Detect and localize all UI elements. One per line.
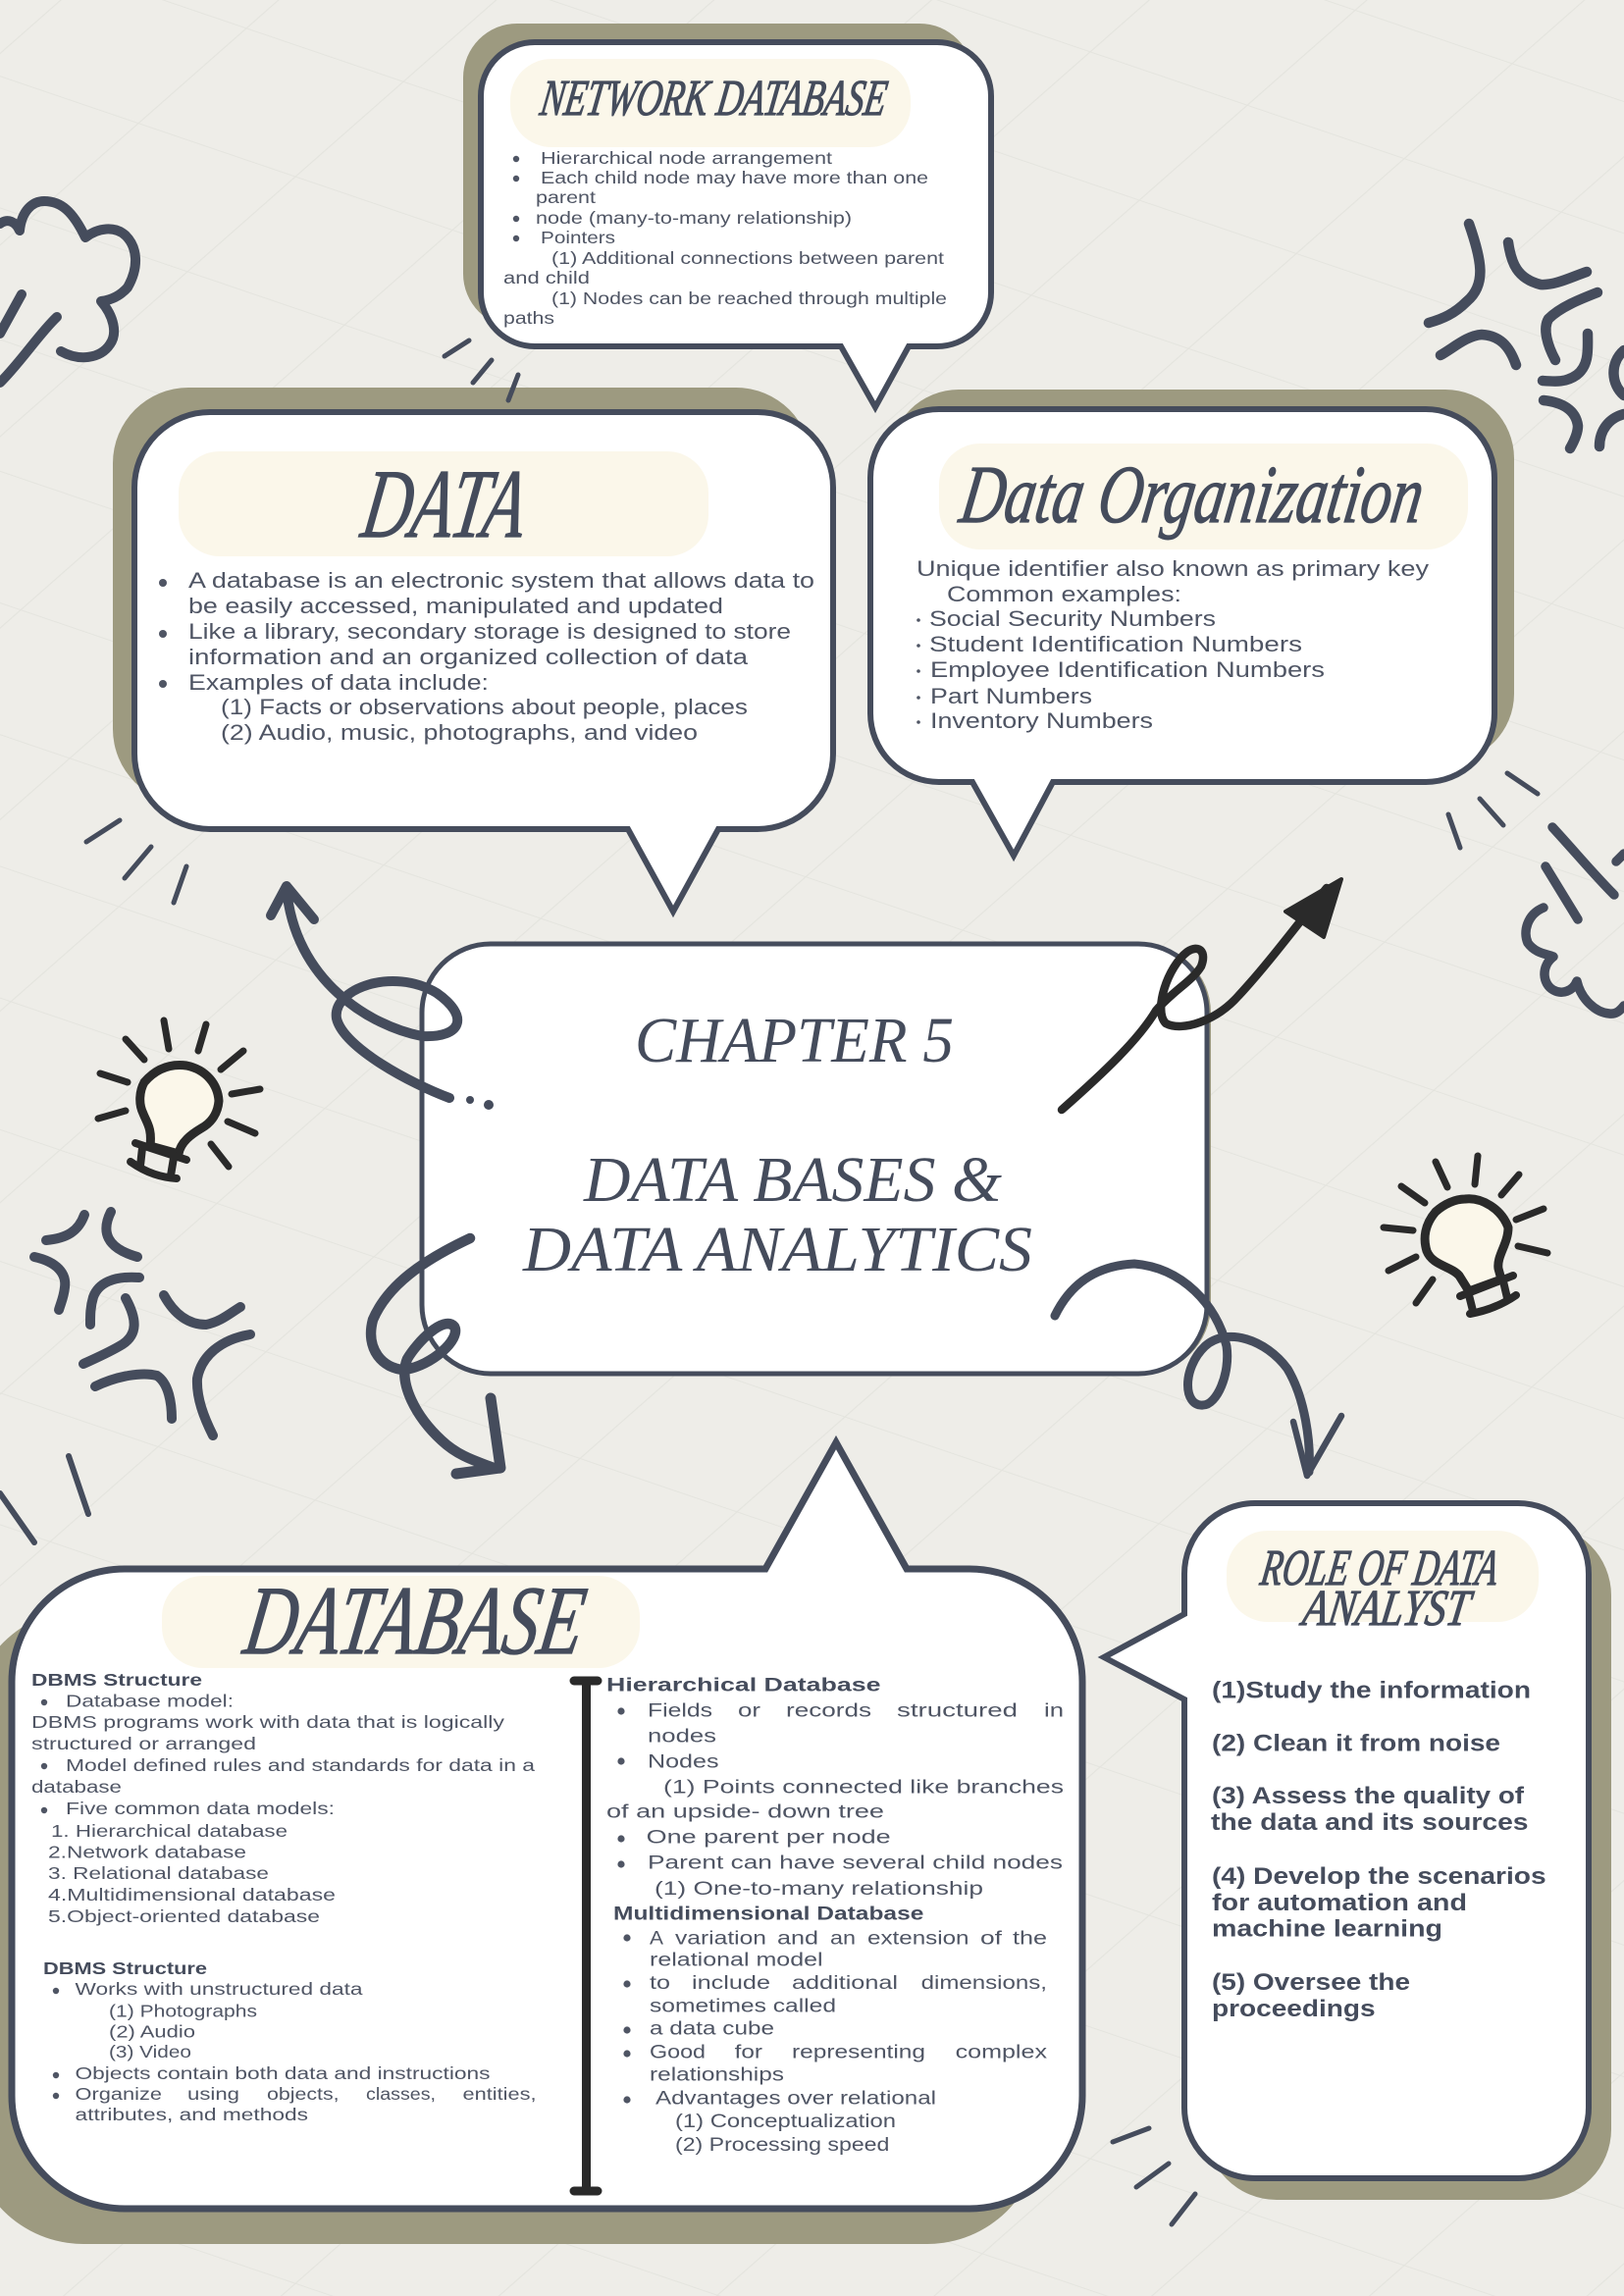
database left column text: 4.Multidimensional database (48, 1885, 336, 1905)
icon: right cloud (1526, 827, 1624, 1014)
database speech bubble (12, 1442, 1082, 2209)
database right column text: nodes (648, 1727, 716, 1747)
chapter subtitle: DATA BASES & (583, 1144, 1003, 1216)
database right column text: include (692, 1973, 770, 1994)
icon: left lightbulb (98, 1020, 260, 1178)
chapter subtitle: DATA ANALYTICS (522, 1214, 1032, 1285)
role heading (1256, 1539, 1503, 1637)
database right column text: Good (650, 2043, 706, 2062)
network heading: NETWORK DATABASE (536, 70, 891, 127)
arrow: to organization panel (1062, 879, 1341, 1110)
role speech bubble (1104, 1503, 1589, 2178)
role list text: proceedings (1212, 1996, 1376, 2022)
database left column text: objects, (267, 2084, 340, 2104)
data heading: DATA (354, 449, 536, 558)
database left column text: entities, (463, 2084, 536, 2104)
database right column text: extension (867, 1929, 969, 1949)
panel: chapter title (422, 944, 1211, 1374)
data body text (159, 568, 814, 745)
right bulb rays (1384, 1156, 1547, 1303)
database right column text: One parent per node (647, 1827, 891, 1849)
database left column text: Database model: (66, 1692, 234, 1711)
database left column text: Five common data models: (66, 1799, 335, 1818)
role burst ticks (1113, 2128, 1195, 2224)
left bulb rays (98, 1020, 260, 1167)
role bubble shadow (1206, 1525, 1611, 2200)
database left column text: using (187, 2084, 239, 2104)
database right column text: representing (792, 2043, 925, 2062)
network burst ticks (445, 340, 518, 400)
organization body text: Employee Identification Numbers (930, 657, 1325, 682)
database right column text: and (777, 1929, 818, 1949)
database right column text: sometimes called (650, 1996, 836, 2017)
database right column text: structured (897, 1701, 1018, 1721)
panel: role of data analyst (1104, 1503, 1611, 2200)
network body text: Each child node may have more than one (541, 168, 928, 187)
database right column text: Hierarchical Database (606, 1676, 881, 1696)
network body text: and child (503, 268, 590, 287)
network body text: (1) Additional connections between parent (551, 248, 944, 268)
network body text (503, 148, 947, 328)
chapter heading: CHAPTER 5 (635, 1005, 954, 1076)
database right column text: of an upside- down tree (606, 1801, 884, 1823)
database right column text: records (786, 1701, 871, 1721)
database right column text: Nodes (648, 1752, 718, 1772)
organization burst ticks (1448, 773, 1538, 848)
left burst ticks (0, 1456, 88, 1542)
title card shadow (426, 944, 1211, 1374)
panel: network database (463, 24, 991, 407)
data body text: be easily accessed, manipulated and updated (188, 594, 723, 618)
icon: left burst squiggles (34, 1212, 250, 1435)
database left column text: structured or arranged (31, 1734, 256, 1753)
data burst ticks (86, 820, 186, 903)
role list text: (4) Develop the scenarios (1212, 1863, 1546, 1890)
database left column text: Organize (75, 2084, 162, 2104)
arrow: to data panel (271, 886, 494, 1110)
database right column text: to (650, 1973, 670, 1994)
database bubble shadow (0, 1609, 1040, 2244)
network heading pill (510, 59, 911, 147)
database right column text: relationships (650, 2064, 784, 2086)
role list text: for automation and (1212, 1890, 1467, 1916)
organization body text: Social Security Numbers (929, 606, 1216, 631)
database right column text (606, 1676, 1064, 2156)
role heading: ANALYST (1297, 1580, 1477, 1637)
data body text: Examples of data include: (188, 670, 489, 695)
panel: data organization (870, 390, 1514, 856)
database right column text: dimensions, (921, 1973, 1047, 1994)
database right column text: (1) Points connected like branches (663, 1778, 1064, 1798)
database right column text: Fields (648, 1701, 712, 1721)
database right column text: (1) Conceptualization (675, 2112, 896, 2132)
database left column text: 1. Hierarchical database (51, 1821, 288, 1841)
organization speech bubble (870, 409, 1494, 856)
icon: top-right burst squiggles (1429, 224, 1624, 448)
role heading: ROLE OF DATA (1256, 1539, 1503, 1596)
organization bubble shadow (890, 390, 1514, 762)
network body text: parent (536, 187, 596, 207)
data body text: (1) Facts or observations about people, places (221, 695, 748, 719)
icon: top-left cloud (0, 201, 135, 383)
database right column text: A (650, 1929, 663, 1949)
organization heading pill (939, 444, 1468, 549)
database right column text: (2) Processing speed (675, 2135, 889, 2156)
network speech bubble (481, 42, 991, 407)
database left column text: (3) Video (109, 2042, 191, 2061)
database left column text: DBMS Structure (43, 1958, 207, 1978)
role list text: (3) Assess the quality of (1212, 1783, 1525, 1809)
panel: data (113, 388, 833, 912)
organization body text: Common examples: (947, 582, 1181, 606)
database right column text: Parent can have several child nodes (648, 1852, 1063, 1874)
database left column text: Works with unstructured data (75, 1979, 363, 1999)
data speech bubble (134, 412, 833, 912)
icon: right lightbulb (1384, 1156, 1547, 1314)
right bulb glass (1425, 1199, 1508, 1291)
organization body text: Student Identification Numbers (929, 632, 1302, 656)
database right column text: variation (675, 1929, 766, 1949)
role list text (1211, 1678, 1546, 2022)
database heading pill (162, 1576, 640, 1668)
database left column text: classes, (366, 2084, 436, 2104)
column divider (574, 1681, 598, 2191)
network body text: (1) Nodes can be reached through multiple (551, 288, 947, 308)
data bubble shadow (113, 388, 812, 805)
database left column text: (1) Photographs (109, 2002, 257, 2021)
database right column text: for (735, 2043, 763, 2062)
database left column text (31, 1670, 536, 2124)
database right column text: relational model (650, 1951, 823, 1970)
role list text: (2) Clean it from noise (1212, 1731, 1500, 1756)
organization heading: Data Organization (954, 449, 1431, 541)
role list text: machine learning (1212, 1915, 1442, 1943)
database right column text: in (1044, 1701, 1064, 1721)
organization body text (917, 556, 1429, 733)
organization body text: Unique identifier also known as primary key (917, 556, 1429, 581)
network body text: Pointers (541, 228, 615, 247)
role list text: (5) Oversee the (1212, 1969, 1410, 1996)
data body text: Like a library, secondary storage is designed to store (188, 619, 791, 644)
database right column text: an (830, 1929, 856, 1949)
database left column text: 5.Object-oriented database (48, 1906, 320, 1926)
network body text: node (many-to-many relationship) (536, 208, 852, 228)
left bulb base (131, 1143, 186, 1178)
data body text: A database is an electronic system that allows data to (188, 568, 814, 593)
panel: database (0, 1442, 1082, 2244)
database right column text: a data cube (650, 2019, 774, 2039)
database left column text: 2.Network database (48, 1843, 246, 1862)
arrow: to role panel (1055, 1264, 1341, 1476)
network bubble shadow (463, 24, 973, 328)
left bulb glass (140, 1066, 219, 1154)
arrow: to database panel (371, 1238, 500, 1474)
database left column text: 3. Relational database (48, 1863, 269, 1883)
database left column text: Objects contain both data and instructions (75, 2063, 491, 2083)
database left column text: attributes, and methods (75, 2105, 308, 2124)
role heading pill (1227, 1531, 1539, 1622)
role list text: (1)Study the information (1212, 1678, 1531, 1703)
database right column text: the (1013, 1929, 1047, 1949)
data heading pill (179, 451, 708, 556)
role list text: the data and its sources (1211, 1809, 1529, 1836)
data body text: information and an organized collection of data (188, 645, 749, 669)
network body text: paths (503, 308, 554, 328)
organization body text: Part Numbers (930, 684, 1092, 708)
database right column text: or (738, 1701, 761, 1721)
database right column text: Advantages over relational (655, 2088, 936, 2110)
database heading: DATABASE (236, 1566, 593, 1675)
database left column text: DBMS Structure (31, 1670, 202, 1690)
title card (422, 944, 1207, 1374)
database left column text: Model defined rules and standards for data in a (66, 1755, 535, 1775)
data body text: (2) Audio, music, photographs, and video (221, 720, 698, 745)
database right column text: of (980, 1929, 1003, 1949)
database right column text: complex (956, 2043, 1048, 2062)
right bulb base (1460, 1276, 1516, 1314)
database left column text: DBMS programs work with data that is logically (31, 1712, 504, 1732)
chapter subtitle (522, 1144, 1032, 1285)
database left column text: (2) Audio (109, 2022, 195, 2042)
database right column text: Multidimensional Database (613, 1904, 923, 1925)
database right column text: (1) One-to-many relationship (655, 1879, 983, 1900)
database right column text: additional (792, 1973, 898, 1994)
network body text: Hierarchical node arrangement (541, 148, 832, 168)
organization body text: Inventory Numbers (930, 708, 1153, 733)
database left column text: database (31, 1777, 122, 1797)
